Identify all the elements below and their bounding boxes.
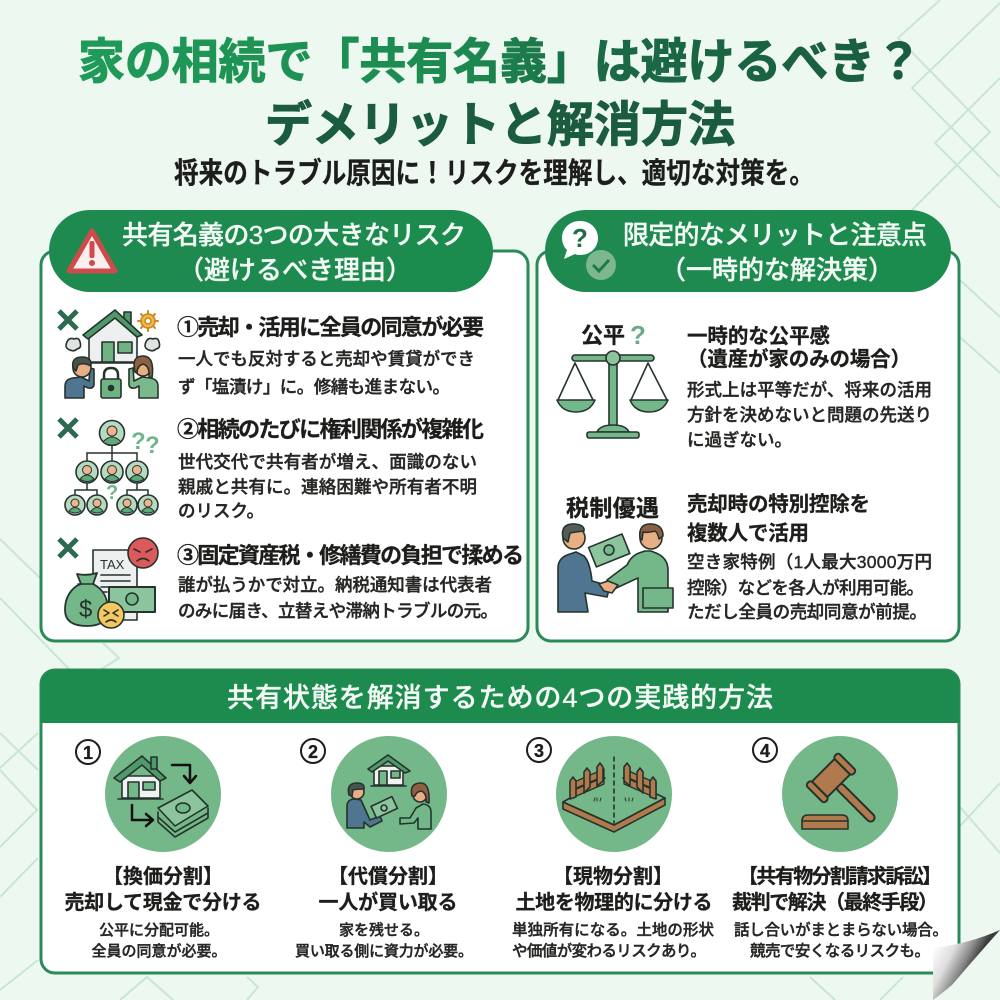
heading: physical split [516,865,712,914]
heading: buyout: 一人が買い取る [318,890,458,914]
method 3 [512,736,714,960]
text: lawsuit: 競売で安くなるリスクも。 [750,942,930,960]
heading: sell [64,865,262,914]
text: complexity [178,452,477,521]
heading: special deduction: 複数人で活用 [687,522,809,545]
merits heading: 限定的なメリットと注意点 [623,220,927,250]
number 1 [76,740,100,764]
text: complexity: 世代交代で共有者が増え、面識のない [178,452,477,472]
text: complexity: 親戚と共有に。連絡困難や所有者不明 [178,477,477,497]
icon: split land [556,736,672,852]
text: cost: のみに届き、立替えや滞納トラブルの元。 [178,601,498,621]
method 1 [64,736,262,960]
text: sell: 全員の同意が必要。 [91,942,227,960]
text: temporary fairness [687,380,932,450]
heading: sell: 【換価分割】 [103,865,223,888]
icon: family tree [65,420,160,515]
number 1: 1 [83,743,93,763]
icon: scales [557,351,668,438]
heading: buyout [318,865,458,914]
number 4: 4 [760,741,770,761]
heading: sell: 売却して現金で分ける [64,891,262,914]
text: cost: 誰が払うかで対立。納税通知書は代表者 [178,575,492,595]
icon: question and check [562,221,616,280]
heading: lawsuit: 【共有物分割請求訴訟】 [738,865,942,888]
heading: temporary fairness: （遺産が家のみの場合） [687,347,911,371]
text: special deduction: 空き家特例（1人最大3000万円 [687,552,932,572]
icon: family tree: ? [145,432,160,459]
panel: risks [41,210,528,641]
icon: family tree: ? [131,428,146,455]
risk 3 [59,538,524,628]
heading: cost: ③固定資産税・修繕費の負担で揉める [177,543,524,568]
heading: temporary fairness: 一時的な公平感 [687,324,830,348]
text: special deduction: ただし全員の売却同意が前提。 [687,602,927,622]
risks heading [122,220,466,285]
text: special deduction [687,552,932,622]
number 2: 2 [308,742,318,762]
text: buyout [295,921,473,960]
merits heading: （一時的な解決策） [660,255,894,285]
icon: gavel [782,736,898,852]
risk 2 [59,417,484,521]
icon: X mark [59,539,77,557]
icon: tax and money: $ [79,596,92,623]
number 4 [753,738,777,762]
method 2 [295,736,473,960]
icon: tax and money [65,538,158,628]
heading: lawsuit: 裁判で解決（最終手段） [732,891,938,914]
icon: warning triangle [69,231,115,271]
icon: question and check: ? [572,223,588,253]
heading: physical split: 土地を物理的に分ける [516,891,712,914]
heading: consent: ①売却・活用に全員の同意が必要 [177,315,484,340]
title [78,36,922,152]
text: consent [178,349,475,397]
icon: family tree: ? [106,482,118,504]
risks header pill [49,210,493,292]
number 3 [527,738,551,762]
merits heading [623,220,927,285]
panel: four methods [41,670,959,973]
page curl [933,930,1000,1000]
label: tax benefit: 税制優遇 [566,495,659,521]
heading: lawsuit [732,865,942,914]
title: 家の相続で「共有名義」は避けるべき？ [78,36,922,89]
text: lawsuit: 話し合いがまとまらない場合。 [734,920,948,939]
merits header pill [545,210,951,292]
icon: buyout [331,736,447,852]
label: fairness: ? [630,320,646,350]
text: sell: 公平に分配可能。 [99,922,219,939]
text: temporary fairness: 方針を決めないと問題の先送り [687,405,932,425]
text: physical split: や価値が変わるリスクあり。 [512,941,706,960]
text: physical split [512,921,714,960]
text: temporary fairness: 形式上は平等だが、将来の活用 [687,380,932,400]
text: complexity: のリスク。 [178,501,264,521]
methods heading: 共有状態を解消するための4つの実践的方法 [227,683,773,713]
risk 1 [59,310,484,398]
method 4 [732,736,948,960]
panel: merits [537,210,959,641]
risks heading: 共有名義の3つの大きなリスク [122,220,466,250]
heading: special deduction: 売却時の特別控除を [687,493,870,516]
title: デメリットと解消方法 [265,99,735,152]
text: lawsuit [734,920,948,960]
heading: complexity: ②相続のたびに権利関係が複雑化 [177,417,484,442]
heading: temporary fairness [687,324,911,371]
heading: buyout: 【代償分割】 [328,865,448,888]
subtitle: 将来のトラブル原因に！リスクを理解し、適切な対策を。 [174,156,814,190]
text: sell [91,922,227,960]
icon: tax and money: TAX [100,557,125,572]
label: fairness: 公平 [581,323,625,348]
merit 1 [557,320,932,450]
number 2 [301,739,325,763]
heading: special deduction [687,493,870,545]
text: physical split: 単独所有になる。土地の形状 [512,921,714,939]
methods header [41,670,959,723]
text: consent: 一人でも反対すると売却や賃貸ができ [178,349,475,369]
text: buyout: 家を残せる。 [339,921,429,939]
text: cost [178,575,498,621]
number 3: 3 [534,741,544,761]
text: buyout: 買い取る側に資力が必要。 [295,942,473,960]
icon: handshake [558,524,673,612]
label: fairness [581,320,646,350]
heading: physical split: 【現物分割】 [553,865,673,888]
icon: house dispute [65,310,160,398]
merit 2 [558,493,932,622]
risks heading: （避けるべき理由） [178,255,412,285]
icon: X mark [59,419,77,437]
text: special deduction: 控除）などを各人が利用可能。 [687,578,924,598]
icon: house to cash [105,736,221,852]
text: consent: ず「塩漬け」に。修繕も進まない。 [178,377,450,397]
icon: X mark [59,311,77,329]
text: temporary fairness: に過ぎない。 [687,430,792,450]
